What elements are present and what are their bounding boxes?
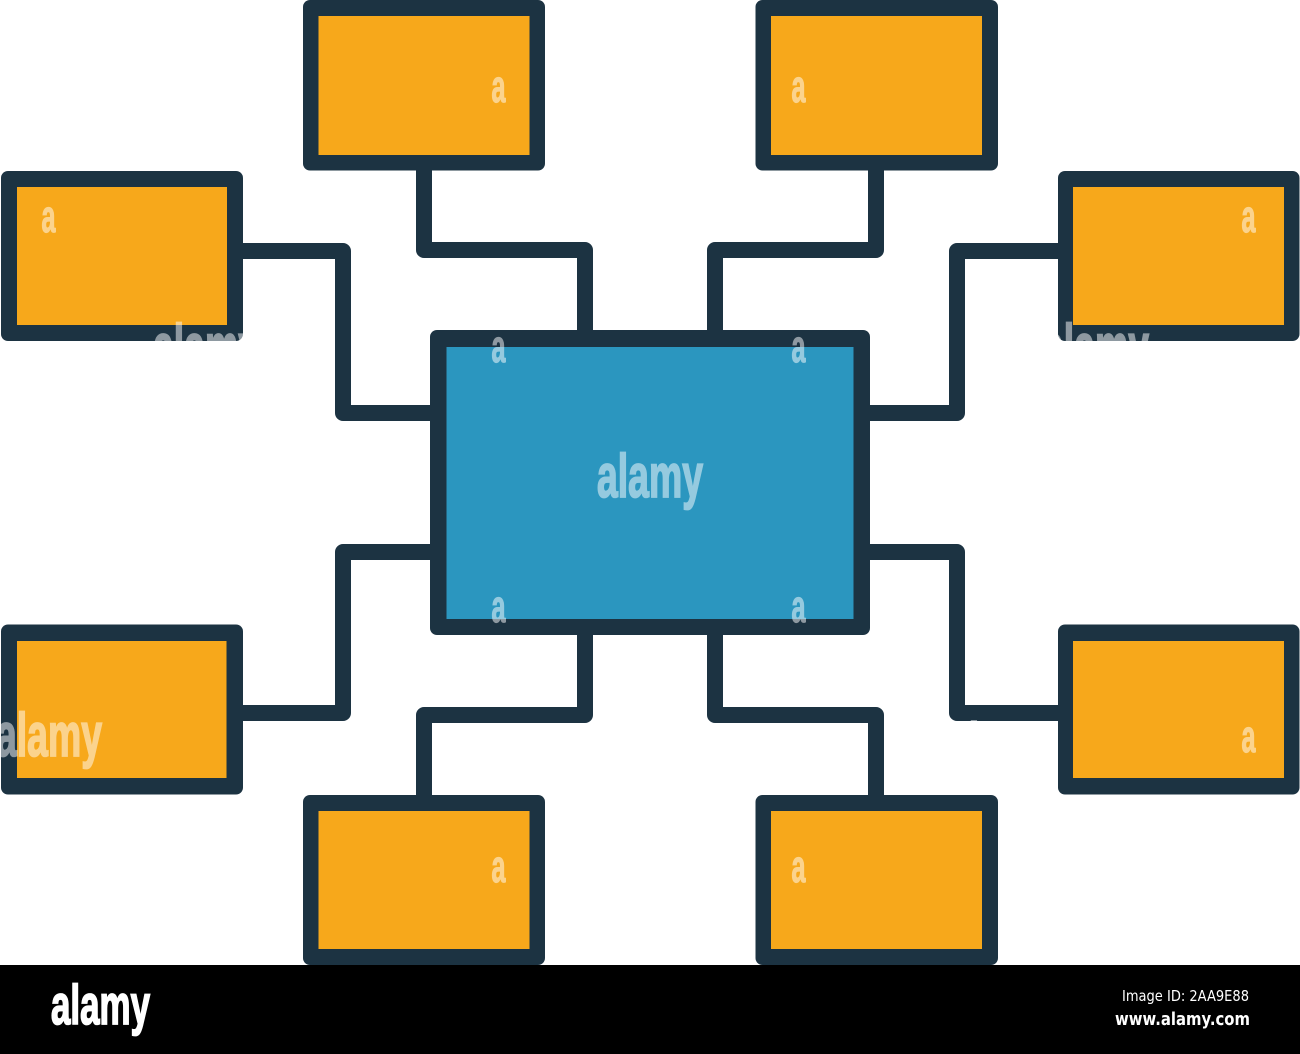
box: top left [303, 0, 545, 170]
box: upper right [1058, 171, 1300, 341]
small watermark letters: a [792, 581, 806, 632]
small watermark letters: a [1242, 191, 1256, 242]
footer band [0, 965, 1300, 1054]
box: lower left [1, 624, 243, 794]
small watermark letters: a [42, 191, 56, 242]
box: upper left [1, 171, 243, 341]
small watermark letters: a [492, 321, 506, 372]
box: bottom left [303, 795, 545, 965]
small watermark letters: a [792, 61, 806, 112]
footer url: www.alamy.com [1115, 1010, 1250, 1030]
small watermark letters: a [492, 61, 506, 112]
small watermark letters [42, 61, 1256, 892]
connector: lower right box to hub [865, 552, 1062, 713]
box: bottom right [756, 795, 998, 965]
watermark: connector edge: alamy [948, 710, 1054, 778]
connector: top left box to hub [424, 165, 585, 335]
connector: bottom left box to hub [424, 630, 585, 800]
watermark: centre: alamy [597, 442, 703, 510]
watermark: lower left box: alamy [0, 701, 102, 769]
footer logo: alamy [51, 973, 150, 1036]
connectors [238, 165, 1062, 800]
connector: bottom right box to hub [715, 630, 876, 800]
connector: upper right box to hub [865, 251, 1062, 413]
small watermark letters: a [492, 581, 506, 632]
box: lower right [1058, 624, 1300, 794]
box: central hub [430, 330, 870, 635]
watermarks [0, 61, 1256, 892]
small watermark letters: a [792, 841, 806, 892]
connector: lower left box to hub [238, 552, 435, 713]
small watermark letters: a [1242, 711, 1256, 762]
footer image id: Image ID: 2AA9E88 [1122, 987, 1249, 1005]
box: top right [756, 0, 998, 170]
watermark: upper left edge: alamy [153, 312, 259, 380]
small watermark letters: a [492, 841, 506, 892]
connector: upper left box to hub [238, 251, 435, 413]
watermark: upper right edge: alamy [1043, 312, 1149, 380]
connector: top right box to hub [715, 165, 876, 335]
small watermark letters: a [792, 321, 806, 372]
